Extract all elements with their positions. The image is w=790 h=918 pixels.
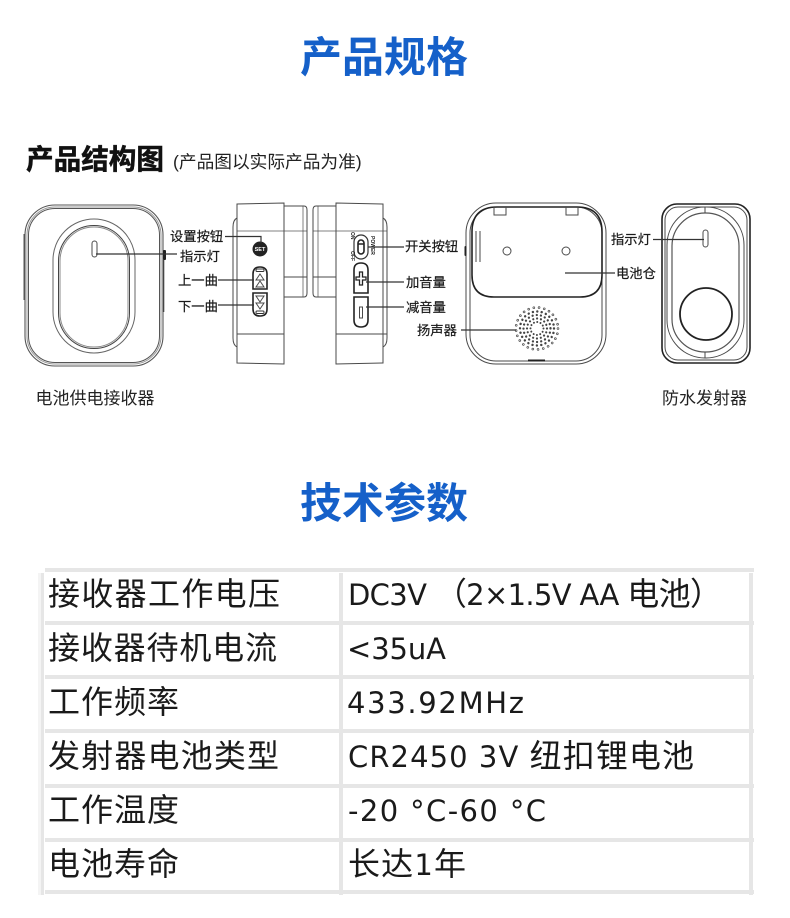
row: battery life: 长达1年 — [348, 845, 466, 883]
icon: next track button — [253, 293, 267, 316]
row: operating frequency: 工作频率 — [48, 683, 179, 721]
heading: product structure diagram: (产品图以实际产品为准) — [173, 152, 362, 172]
heading: product structure diagram: 产品结构图 — [26, 137, 164, 177]
table grid — [38, 568, 754, 895]
icon: speaker grille — [516, 308, 558, 350]
row: receiver standby current: 接收器待机电流 — [48, 629, 277, 667]
row: transmitter battery type: 发射器电池类型 — [48, 737, 279, 775]
callout labels: 指示灯 — [611, 232, 651, 247]
icon: receiver indicator light — [92, 241, 97, 257]
callout labels: 上一曲 — [178, 273, 218, 288]
row: operating temperature: -20 °C-60 °C — [348, 794, 546, 828]
icon: transmitter indicator light — [703, 230, 708, 247]
icon: power switch: POWER — [369, 236, 375, 255]
row: operating temperature: 工作温度 — [48, 791, 179, 829]
row: receiver voltage: 接收器工作电压 — [48, 575, 280, 613]
row: transmitter battery type — [48, 737, 694, 775]
callout labels — [170, 229, 656, 338]
device: waterproof transmitter — [662, 204, 750, 363]
row: battery life: 电池寿命 — [48, 845, 179, 883]
row: battery life — [48, 845, 466, 883]
caption: waterproof transmitter: 防水发射器 — [662, 389, 747, 408]
row: receiver voltage: DC3V （2×1.5V AA 电池） — [348, 575, 722, 613]
callout labels: 加音量 — [406, 274, 446, 290]
icon: power switch — [349, 232, 375, 261]
icon: volume down button — [354, 297, 368, 327]
heading: product structure diagram — [26, 137, 362, 177]
callout labels: 开关按钮 — [405, 239, 458, 254]
icon: volume up button — [354, 263, 368, 293]
callout labels: 下一曲 — [178, 299, 218, 314]
callout labels: 电池仓 — [616, 266, 656, 281]
row: receiver standby current — [48, 629, 446, 667]
callout labels: 扬声器 — [417, 323, 457, 338]
leader lines — [96, 236, 704, 330]
callout labels: 减音量 — [406, 299, 446, 315]
title: technical parameters: 技术参数 — [300, 480, 468, 527]
callout labels: 设置按钮 — [170, 229, 223, 244]
device: receiver right side — [313, 203, 387, 364]
device: battery receiver front — [24, 205, 166, 366]
row: operating frequency: 433.92MHz — [347, 686, 524, 720]
row: transmitter battery type: CR2450 3V 纽扣锂电池 — [348, 737, 694, 775]
spec table — [38, 568, 754, 895]
icon: power switch: ON — [349, 232, 355, 240]
row: receiver standby current: <35uA — [347, 632, 446, 666]
row: operating frequency — [48, 683, 524, 721]
icon: SET button — [252, 242, 268, 256]
row: operating temperature — [48, 791, 546, 829]
device: receiver left side — [233, 203, 307, 364]
icon: power switch: OFF — [349, 251, 355, 261]
icon: SET button: SET — [255, 247, 266, 253]
row: receiver voltage — [48, 575, 722, 613]
caption: battery receiver: 电池供电接收器 — [36, 389, 154, 408]
callout labels: 指示灯 — [180, 249, 220, 264]
title: product specs: 产品规格 — [300, 34, 468, 81]
icon: previous track button — [253, 267, 267, 289]
device: receiver back — [464, 203, 606, 364]
